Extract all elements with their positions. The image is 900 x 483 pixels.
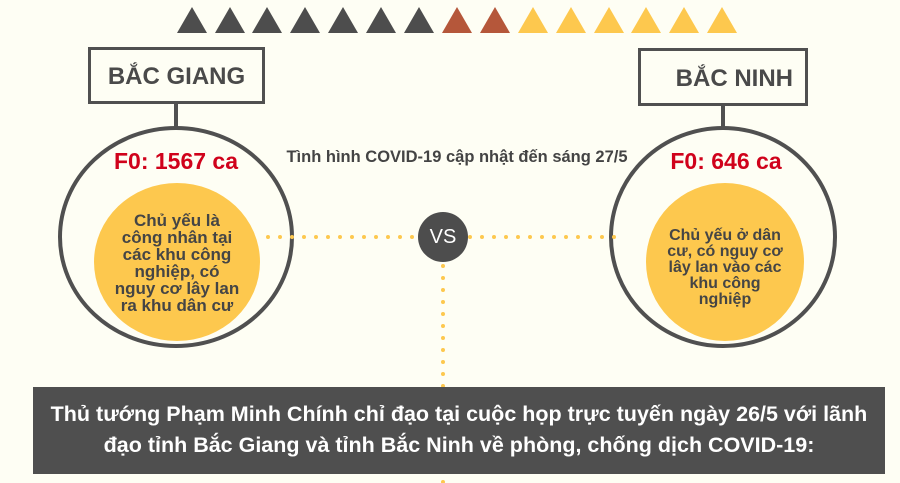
box: Bắc Giang: BẮC GIANG <box>108 63 245 90</box>
F0 Bắc Giang: F0: 1567 ca <box>114 148 238 174</box>
text: Bắc Giang <box>115 211 239 315</box>
box: Bắc Ninh <box>638 48 808 106</box>
text: Bắc Giang: ra khu dân cư <box>121 296 233 315</box>
text: Bắc Ninh: khu công <box>689 275 761 292</box>
text: Bắc Ninh <box>667 227 783 308</box>
text: Bắc Giang: các khu công <box>123 245 231 264</box>
bottom banner <box>33 387 885 474</box>
text: Bắc Giang: Chủ yếu là <box>134 211 220 230</box>
VS badge <box>418 212 468 262</box>
text: Bắc Ninh: Chủ yếu ở dân <box>669 227 781 244</box>
text: Bắc Giang: nghiệp, có <box>134 262 220 281</box>
text: Bắc Ninh: lây lan vào các <box>669 259 781 276</box>
bottom banner: đạo tỉnh Bắc Giang và tỉnh Bắc Ninh về phòng, chống dịch COVID-19: <box>104 433 814 457</box>
triangle row <box>177 7 737 33</box>
text: Bắc Ninh: nghiệp <box>699 291 751 308</box>
text: Bắc Ninh: cư, có nguy cơ <box>667 243 783 260</box>
F0 Bắc Ninh: F0: 646 ca <box>670 148 782 174</box>
text: Bắc Giang: nguy cơ lây lan <box>115 279 239 298</box>
text: Bắc Giang: công nhân tại <box>122 228 232 247</box>
VS badge: VS <box>430 226 456 248</box>
subtitle: Tình hình COVID-19 cập nhật đến sáng 27/5 <box>286 148 628 166</box>
box: Bắc Giang <box>88 47 265 104</box>
box: Bắc Ninh: BẮC NINH <box>676 65 793 92</box>
bottom banner: Thủ tướng Phạm Minh Chính chỉ đạo tại cuộc họp trực tuyến ngày 26/5 với lãnh <box>51 402 867 426</box>
